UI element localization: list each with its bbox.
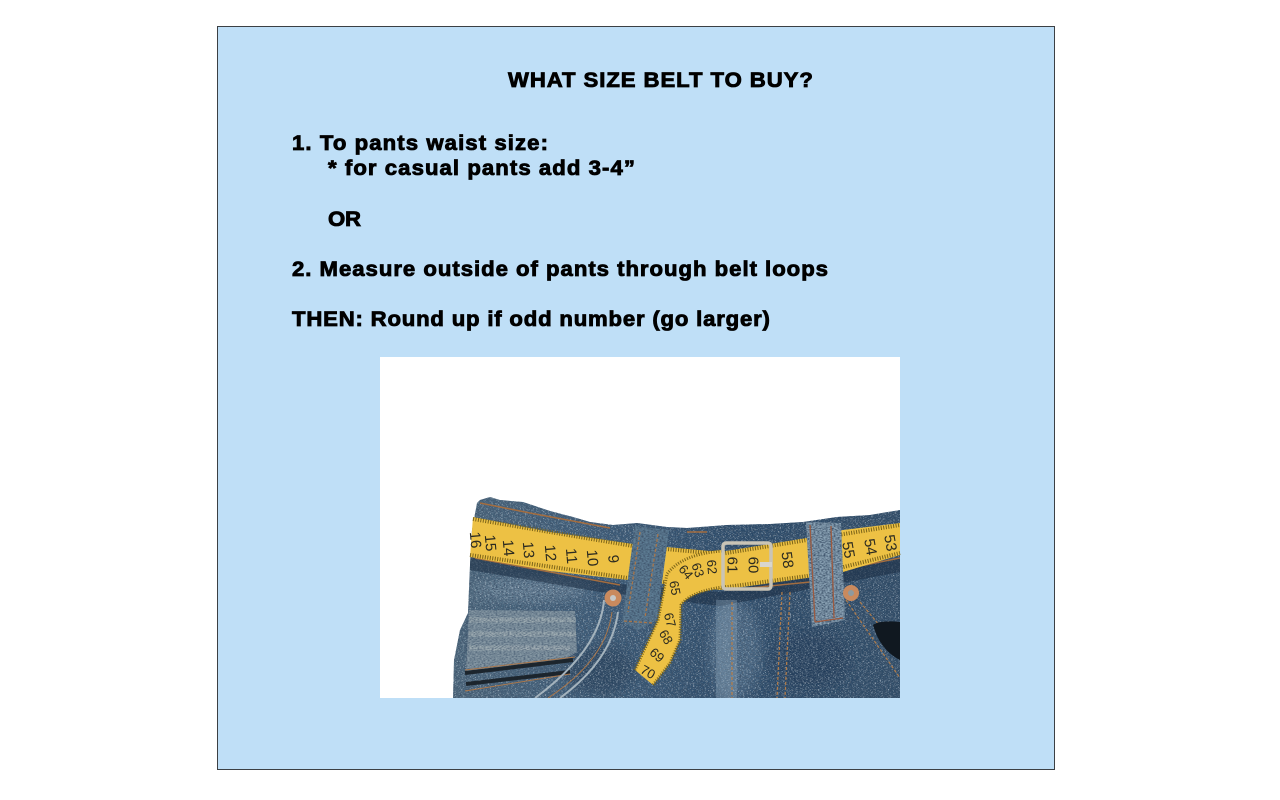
title: WHAT SIZE BELT TO BUY? [508, 67, 813, 92]
illustration: jeans with measuring tape belt [380, 357, 900, 700]
hanging tape numbers: 63 [688, 561, 708, 579]
instructions text block: THEN: Round up if odd number (go larger) [292, 306, 770, 331]
instructions text block [292, 130, 828, 331]
belt loops [622, 526, 669, 630]
tape numbers: 14 [499, 539, 517, 557]
instructions text block: 2. Measure outside of pants through belt loops [292, 256, 828, 281]
tape numbers: 10 [583, 549, 601, 567]
tape numbers: 12 [541, 544, 559, 562]
measuring tape band [470, 517, 900, 590]
instructions text block: * for casual pants add 3-4” [328, 155, 635, 180]
hanging tape numbers: 65 [666, 580, 684, 596]
tape numbers: 11 [562, 547, 580, 565]
tape numbers [466, 531, 900, 573]
photo background [380, 357, 900, 698]
hanging tape numbers: 69 [647, 645, 667, 665]
tape numbers: 60 [744, 557, 762, 573]
tape numbers: 58 [777, 551, 797, 569]
belt buckle [723, 543, 771, 589]
tape numbers: 13 [519, 541, 537, 559]
hanging tape numbers: 62 [704, 559, 720, 575]
tape numbers: 16 [466, 531, 484, 549]
tape numbers: 15 [481, 534, 499, 552]
hanging tape numbers: 64 [676, 562, 696, 582]
hanging tape numbers [638, 559, 720, 682]
tape numbers: 55 [838, 540, 858, 560]
hanging tape numbers: 67 [661, 611, 679, 629]
tape numbers: 54 [860, 537, 880, 557]
hanging tape numbers: 70 [638, 662, 658, 682]
tape numbers: 53 [880, 533, 900, 553]
tape numbers: 61 [724, 557, 740, 573]
jeans [450, 495, 900, 700]
hanging tape numbers: 68 [656, 627, 676, 647]
panel: blue background [218, 26, 1054, 770]
rivets [604, 590, 622, 606]
hanging tape end [635, 550, 722, 685]
tape numbers: 9 [604, 554, 622, 564]
instructions text block: 1. To pants waist size: [292, 130, 548, 155]
instructions text block: OR [328, 206, 361, 231]
